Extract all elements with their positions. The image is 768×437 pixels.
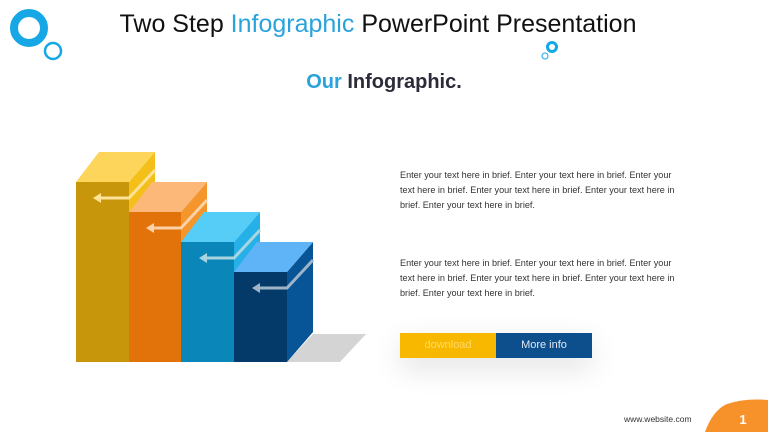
chart: 3D step bars — [76, 152, 366, 362]
text block 1: Enter your text here in brief. Enter your text here in brief. Enter your text here in brief. Enter your text here in brief. Enter your text here in brief. Enter your text here in brief. — [400, 170, 674, 210]
button: more info: More info — [521, 339, 567, 351]
bar: yellow — [76, 152, 155, 362]
footer url: www.website.com — [624, 414, 692, 424]
buttons — [400, 333, 592, 358]
text block 2: Enter your text here in brief. Enter your text here in brief. Enter your text here in brief. Enter your text here in brief. Enter your text here in brief. Enter your text here in brief. — [400, 258, 674, 298]
icon: small circles — [542, 41, 558, 60]
page number badge: 1 — [739, 412, 747, 427]
button: download: download — [424, 339, 472, 351]
button: more info — [496, 333, 592, 358]
title: Two Step Infographic PowerPoint Presentation — [120, 10, 636, 38]
bar: navy — [234, 242, 313, 362]
icon: decorative circles top-left — [10, 9, 62, 60]
subtitle: Our Infographic. — [306, 71, 462, 93]
shadow — [287, 334, 366, 362]
button: download — [400, 333, 496, 358]
bar: orange — [129, 182, 207, 362]
bar: blue — [181, 212, 260, 362]
page number badge — [705, 400, 768, 432]
